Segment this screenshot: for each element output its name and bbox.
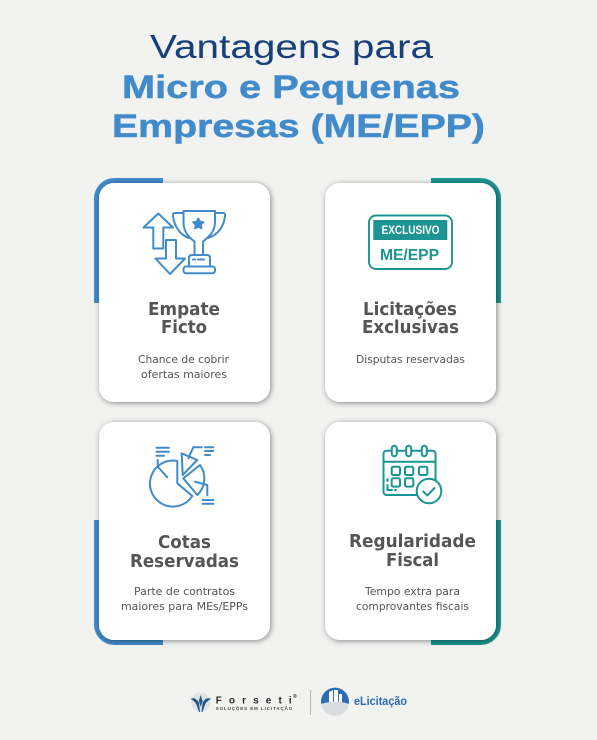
heading: Cotas Reservadas: Cotas [158,532,211,553]
icon: exclusive badge [369,216,452,269]
icon: trophy with arrows [144,211,225,274]
logo: eLicitação: eLicitação [354,696,407,708]
title [112,28,485,144]
text: Cotas Reservadas description [121,585,248,613]
text: Empate Ficto description: ofertas maiores [141,368,227,381]
text: Regularidade Fiscal description [356,585,469,613]
logo: eLicitação [321,688,407,716]
heading: Licitações Exclusivas: Licitações [363,299,457,320]
text: Empate Ficto description: Chance de cobrir [138,353,229,366]
heading: Regularidade Fiscal: Fiscal [386,550,439,571]
panel: Regularidade Fiscal [325,422,498,642]
panel: Empate Ficto [96,180,270,402]
icon: calendar with check [384,446,441,503]
heading: Empate Ficto [148,299,220,338]
heading: Empate Ficto: Empate [148,299,220,320]
heading: Licitações Exclusivas [362,299,459,338]
text: Regularidade Fiscal description: Tempo extra para [364,585,460,598]
heading: Cotas Reservadas [130,532,239,572]
heading: Cotas Reservadas: Reservadas [130,551,239,572]
panel: Licitações Exclusivas [325,180,498,402]
heading: Empate Ficto: Ficto [161,317,207,338]
icon: exclusive badge: ME/EPP [380,247,439,264]
title: Empresas (ME/EPP) [112,108,485,144]
heading: Regularidade Fiscal [349,531,476,571]
logo: Forseti: Forseti [216,695,292,706]
icon: exclusive badge: EXCLUSIVO [382,225,440,237]
text: Empate Ficto description [138,353,229,381]
logo: Forseti [190,692,297,712]
icon: pie chart [150,447,213,507]
text: Cotas Reservadas description: Parte de contratos [134,585,235,598]
text: Licitações Exclusivas description: Disputas reservadas [356,353,465,366]
title: Vantagens para [150,28,434,65]
heading: Regularidade Fiscal: Regularidade [349,531,476,552]
text: Regularidade Fiscal description: comprovantes fiscais [356,600,469,613]
logo: Forseti: ® [293,693,297,700]
heading: Licitações Exclusivas: Exclusivas [362,317,459,338]
title: Micro e Pequenas [122,69,460,105]
divider [310,690,311,715]
logo: Forseti: SOLUÇÕES EM LICITAÇÃO [216,706,293,711]
text: Cotas Reservadas description: maiores para MEs/EPPs [121,600,248,613]
panel: Cotas Reservadas [96,422,270,642]
